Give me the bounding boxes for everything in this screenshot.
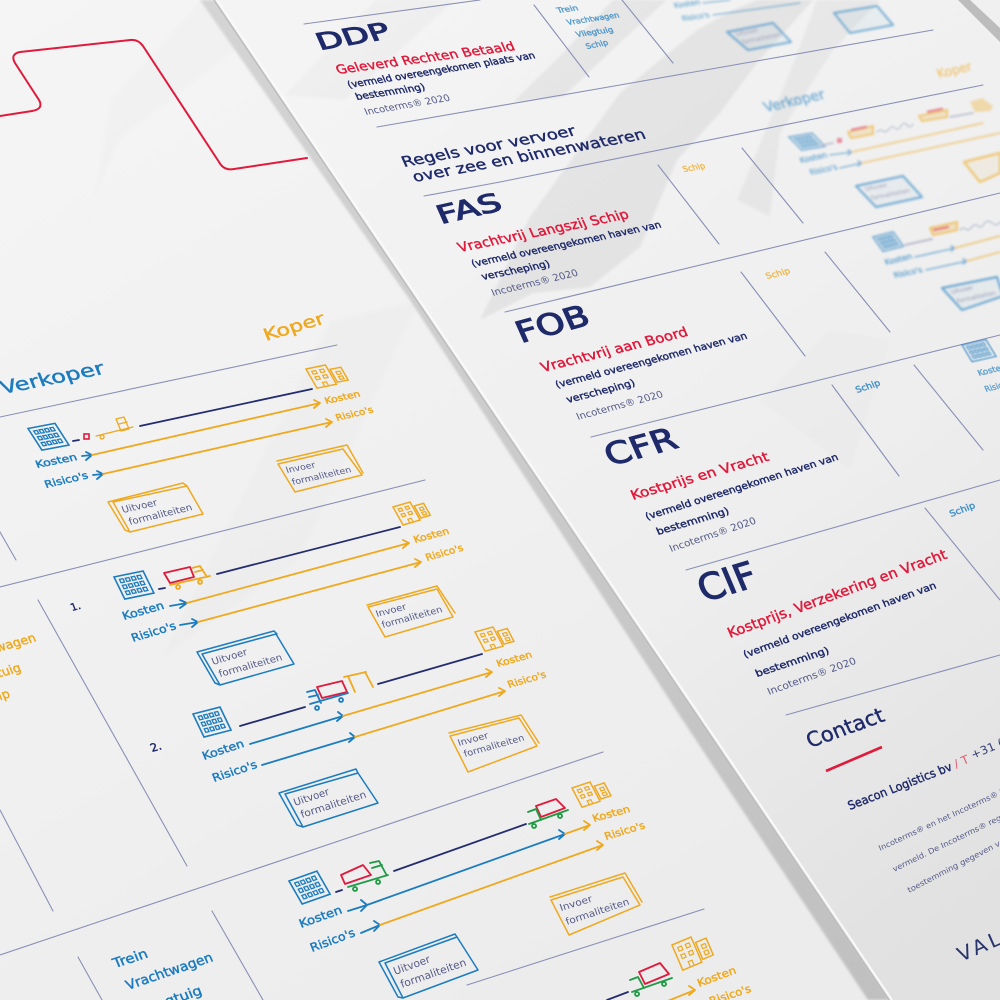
icon: seller building xyxy=(789,133,825,150)
column rules xyxy=(0,532,263,1000)
box: Uitvoer formaliteiten: formaliteiten xyxy=(741,31,783,46)
heading: sea rules: Regels voor vervoer xyxy=(399,124,579,171)
arrow: Risico's cont. xyxy=(103,419,332,474)
panel: CFR xyxy=(599,340,1000,555)
box: Uitvoer formaliteiten xyxy=(727,23,791,50)
name: Vrachtvrij aan Boord xyxy=(538,325,691,376)
icon: buyer building xyxy=(970,98,993,112)
name: Geleverd Rechten Betaald xyxy=(333,39,517,77)
arrows xyxy=(830,150,862,168)
icon: seller building xyxy=(962,340,996,362)
transport list: Vliegtuig xyxy=(574,25,615,39)
box: Uitvoer formaliteiten: formaliteiten xyxy=(399,957,468,991)
transport list: Schip xyxy=(584,38,610,51)
transport chain xyxy=(822,113,973,145)
place line 1: (vermeld overeengekomen haven van xyxy=(742,580,938,661)
icon: seller building xyxy=(289,871,330,904)
red outline path xyxy=(0,40,307,169)
label: Kosten buyer: Kosten xyxy=(495,650,534,670)
transport chain xyxy=(159,527,400,589)
arrow: Kosten xyxy=(82,452,92,460)
FAS blurred diagram: Risico's xyxy=(808,162,839,177)
box: Uitvoer formaliteiten: Uitvoer xyxy=(292,787,332,809)
number 2: 2. xyxy=(148,740,164,755)
box: Uitvoer formaliteiten xyxy=(379,934,478,998)
box: Uitvoer formaliteiten xyxy=(279,769,378,827)
row 3: diagram xyxy=(289,778,647,998)
place line 2: bestemming) xyxy=(354,82,427,103)
mode: Schip xyxy=(681,161,707,174)
icon: seller building xyxy=(114,571,154,599)
box: Invoer formaliteiten xyxy=(964,153,1000,182)
containers xyxy=(934,227,948,230)
icon: buyer building xyxy=(572,778,612,807)
transport chain xyxy=(240,654,482,726)
icon: seller building xyxy=(873,232,903,251)
mode: Schip xyxy=(854,378,882,396)
code: CFR xyxy=(599,421,683,474)
sea wave xyxy=(877,123,913,132)
label: Risico's: Risico's xyxy=(129,619,178,645)
arrows cont. xyxy=(955,236,1000,261)
label: Risico's buyer: Risico's xyxy=(603,820,647,843)
box: Invoer formaliteiten: formaliteiten xyxy=(291,465,353,488)
labels: Kosten xyxy=(883,252,914,267)
column rules xyxy=(534,0,1000,600)
box: Uitvoer formaliteiten: Uitvoer xyxy=(120,498,159,516)
heading: Verkoper: Verkoper xyxy=(761,87,828,116)
panel: right sheet content xyxy=(304,0,1000,967)
row 1: diagram EXW xyxy=(28,362,375,532)
box: Invoer formaliteiten xyxy=(550,873,642,935)
icon: ship xyxy=(848,110,947,138)
panel: left sheet content xyxy=(0,40,753,1000)
arrows xyxy=(348,830,565,933)
phone separator: / T xyxy=(952,753,971,771)
code: FOB xyxy=(510,298,595,350)
label: Risico's buyer: Risico's xyxy=(506,669,548,691)
faint shadows on left sheet xyxy=(70,0,420,660)
panel: FOB xyxy=(510,266,792,423)
row 2.2: diagram xyxy=(193,624,548,827)
place line 1: (vermeld overeengekomen plaats van xyxy=(346,50,537,91)
arrows xyxy=(250,712,355,765)
arrow: Kosten cont. xyxy=(92,400,320,455)
wave xyxy=(960,221,1000,230)
arrows cont. xyxy=(343,669,505,737)
top-right neighbouring sheet xyxy=(958,0,1000,42)
box: Invoer formaliteiten xyxy=(367,586,455,637)
box: Invoer formaliteiten: Invoer xyxy=(285,460,318,476)
box: Uitvoer formaliteiten: formaliteiten xyxy=(870,187,912,202)
version: Incoterms® 2020 xyxy=(668,516,758,555)
version: Incoterms® 2020 xyxy=(490,268,580,299)
icon: ship xyxy=(930,222,957,235)
transport chain xyxy=(336,824,526,892)
box: Invoer formaliteiten: Invoer xyxy=(558,894,594,914)
label: Kosten buyer: Kosten xyxy=(591,804,632,825)
icon: truck yellow cab xyxy=(170,566,210,589)
label: Kosten buyer: Kosten xyxy=(323,390,362,407)
arrow: Risico's xyxy=(93,471,103,479)
mode: Schip xyxy=(948,501,977,520)
transport list: yellow xyxy=(0,631,38,709)
arrows xyxy=(620,986,720,1000)
heading: sea rules: over zee en binnenwateren xyxy=(410,127,649,186)
top-right blurred diagram xyxy=(672,0,893,50)
icon: seller building xyxy=(193,707,231,737)
heading: Contact: Contact xyxy=(802,703,888,753)
label: Kosten: Kosten xyxy=(200,737,246,763)
box: Uitvoer: formaliteiten xyxy=(956,290,998,305)
box: Invoer formaliteiten xyxy=(449,715,539,772)
version: Incoterms® 2020 xyxy=(575,389,665,423)
icon: truck green cab xyxy=(630,977,672,996)
transport chain xyxy=(73,389,312,441)
FOB blurred diagram xyxy=(873,221,1000,310)
label: Kosten buyer: Kosten xyxy=(696,964,738,990)
transport chain xyxy=(607,992,628,1000)
icon: truck red box xyxy=(164,567,194,583)
red parcel xyxy=(838,139,841,142)
labels: Kosten xyxy=(798,150,829,165)
diagonal shadows on right sheet xyxy=(285,0,890,470)
panel: FAS xyxy=(431,161,707,299)
transport list: Vrachtwagen xyxy=(565,11,621,27)
box: Invoer formaliteiten: Invoer xyxy=(375,602,408,620)
box: Uitvoer formaliteiten: formaliteiten xyxy=(217,652,284,680)
place line 2: bestemming) xyxy=(655,506,731,538)
code: DDP xyxy=(312,19,395,56)
divider xyxy=(0,752,603,955)
box: Uitvoer formaliteiten xyxy=(197,631,294,685)
icon: buyer building xyxy=(306,362,349,388)
heading: sea rules xyxy=(399,124,649,186)
label: Risico's buyer: Risico's xyxy=(334,405,375,424)
name: Kostprijs, Verzekering en Vracht xyxy=(725,547,950,642)
box: Uitvoer formaliteiten xyxy=(108,483,203,532)
arrows cont. xyxy=(852,123,1000,163)
icon: seller building xyxy=(28,423,69,450)
box: Uitvoer formaliteiten xyxy=(856,176,922,207)
dividers xyxy=(304,0,1000,715)
box: Invoer formaliteiten xyxy=(277,445,363,492)
name: Kostprijs en Vracht xyxy=(628,450,772,504)
code: FAS xyxy=(431,188,507,230)
icon: truck red box xyxy=(341,799,565,884)
icon: red parcel xyxy=(84,434,89,439)
label: Risico's buyer: Risico's xyxy=(424,543,465,564)
place line 2: bestemming) xyxy=(754,645,831,680)
arrows xyxy=(915,246,967,270)
transport list: Trein xyxy=(554,3,580,15)
transport list: blue: Trein xyxy=(110,947,151,972)
box: Uitvoer formaliteiten: formaliteiten xyxy=(127,502,194,528)
place line 1: (vermeld overeengekomen haven van xyxy=(644,452,840,523)
sheet edge highlight xyxy=(217,0,892,1000)
place line 2: verscheping) xyxy=(480,259,552,283)
icon: yellow gate xyxy=(344,672,373,692)
label: Kosten: Kosten xyxy=(120,599,166,623)
arrows cont. xyxy=(380,821,603,925)
FOB blurred diagram: Risico's xyxy=(892,265,924,280)
transport chain xyxy=(905,239,932,245)
icon: forklift xyxy=(96,417,133,439)
place line 1: (vermeld overeengekomen haven van xyxy=(554,331,749,391)
divider xyxy=(0,480,425,587)
heading: Koper: Koper xyxy=(934,59,974,81)
place line 2: verscheping) xyxy=(565,378,637,406)
box: Uitvoer formaliteiten: Uitvoer xyxy=(735,27,760,38)
divider xyxy=(0,345,337,417)
gutter shadow between sheets xyxy=(200,0,890,1000)
box: Invoer formaliteiten xyxy=(834,6,893,33)
transport list xyxy=(554,3,621,51)
name: Vrachtvrij Langszij Schip xyxy=(455,208,632,256)
label: Kosten buyer: Kosten xyxy=(412,526,451,546)
FAS blurred diagram xyxy=(761,59,1000,207)
icon: buyer building xyxy=(672,932,714,970)
box: Uitvoer formaliteiten: Uitvoer xyxy=(210,647,249,668)
company name: Seacon Logistics bv xyxy=(845,759,954,813)
box: Invoer formaliteiten: formaliteiten xyxy=(564,897,631,928)
version: Incoterms® 2020 xyxy=(363,93,452,118)
box: Uitvoer formaliteiten: formaliteiten xyxy=(299,790,368,821)
divider xyxy=(467,909,704,985)
version: Incoterms® 2020 xyxy=(766,656,858,698)
background: right sheet xyxy=(214,0,1000,1000)
place line 1: (vermeld overeengekomen haven van xyxy=(470,220,663,270)
heading: Koper: Koper xyxy=(260,309,328,345)
icon: containers xyxy=(852,109,942,130)
box: Invoer formaliteiten: Invoer xyxy=(457,731,490,749)
arrows xyxy=(703,0,800,15)
icon: truck blue cab xyxy=(307,690,348,710)
number 1: 1. xyxy=(69,601,83,614)
label: Risico's: Risico's xyxy=(308,925,357,955)
red bar xyxy=(826,747,882,771)
panel: DDP xyxy=(312,3,621,118)
icon: truck red box xyxy=(639,963,669,984)
box: Uitvoer formaliteiten: Uitvoer xyxy=(864,182,889,193)
box: Invoer formaliteiten: formaliteiten xyxy=(381,605,444,631)
arrows cont. xyxy=(187,540,421,622)
row 2.1: diagram xyxy=(114,499,465,685)
box: Uitvoer: Uitvoer xyxy=(950,284,975,296)
panel: Contact xyxy=(802,701,1000,967)
label: Kosten: Kosten xyxy=(34,452,79,471)
transport list: blue: Vrachtwagen xyxy=(124,950,216,994)
icon: truck red box xyxy=(317,681,347,698)
icon: truck green cab xyxy=(348,809,568,891)
code: CIF xyxy=(691,555,764,611)
panel: CIF xyxy=(691,501,977,698)
label: Risico's: Risico's xyxy=(210,758,259,785)
arrows xyxy=(170,600,198,627)
top-right blurred diagram: Risico's xyxy=(680,11,711,23)
box: Invoer formaliteiten: formaliteiten xyxy=(463,734,526,760)
icon: buyer building xyxy=(475,624,515,651)
box: Uitvoer xyxy=(942,277,1000,310)
label: Risico's: Risico's xyxy=(43,471,90,491)
row 4: diagram xyxy=(607,932,753,1000)
icon: buyer building xyxy=(393,499,431,525)
box: Uitvoer formaliteiten: Uitvoer xyxy=(392,953,433,978)
label: Kosten: Kosten xyxy=(297,902,344,931)
sheet edge xyxy=(214,0,889,1000)
mode: Schip xyxy=(764,266,792,281)
